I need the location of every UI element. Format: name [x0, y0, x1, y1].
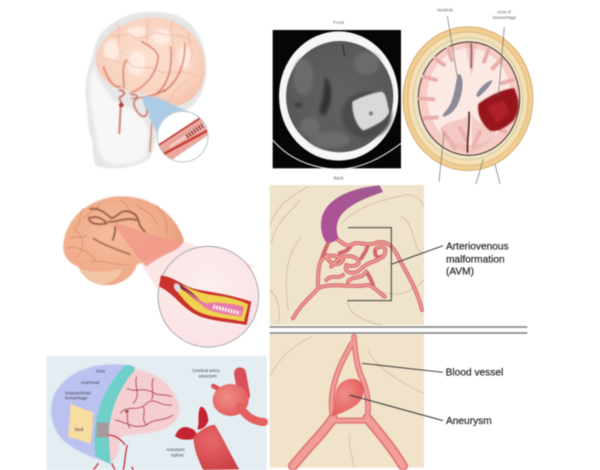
AVM leader line	[391, 246, 443, 264]
labels: Dura	[96, 369, 106, 374]
label: Area of hemorrhage: hemorrhage	[493, 15, 517, 20]
label: Front: Front	[333, 20, 345, 25]
midline	[468, 43, 474, 68]
infographic canvas	[46, 8, 534, 470]
panel: head with brain arteries	[85, 12, 213, 169]
brain	[96, 18, 205, 105]
AVM illustration	[270, 185, 424, 325]
tangled vessels	[293, 240, 422, 318]
draining vein	[321, 185, 383, 244]
labels: Cerebral artery	[192, 368, 221, 373]
labels: Skull	[74, 427, 83, 432]
artery with plaque	[159, 276, 251, 325]
magnifier wedge	[143, 96, 188, 147]
labels: rupture	[171, 452, 185, 457]
dark sulci	[88, 209, 145, 254]
labels: Aneurysm	[166, 447, 185, 452]
skull	[68, 404, 93, 444]
labels: Ventricle: Ventricle	[437, 7, 454, 12]
head silhouette	[85, 12, 206, 169]
aneurysm label: Aneurysm	[446, 416, 492, 427]
hemorrhage	[352, 92, 389, 131]
panel: subarachnoid hemorrhage illustration	[47, 356, 267, 470]
AVM label: Arteriovenous	[446, 241, 509, 252]
ruptured aneurysm	[175, 407, 239, 470]
aneurysm illustration	[270, 334, 424, 468]
labels: Subarachnoid	[65, 390, 91, 395]
CT image	[273, 30, 401, 169]
skull	[279, 31, 398, 161]
brain	[105, 369, 179, 463]
leader lines	[439, 16, 504, 184]
panel background	[47, 356, 267, 470]
wedge over brain	[114, 222, 184, 267]
arteries	[103, 42, 185, 152]
hemorrhage patch	[97, 423, 109, 437]
aneurysm sac	[331, 379, 364, 417]
panel: brain with blocked artery	[63, 196, 259, 347]
labels: Arachnoid	[81, 380, 100, 385]
blood vessel label: Blood vessel	[446, 368, 503, 379]
lens circle	[158, 246, 259, 347]
panel: brain cross-section illustration	[403, 7, 533, 184]
magnified artery lens	[157, 111, 213, 163]
pink zoom wedge	[114, 222, 253, 345]
AVM label: malformation	[446, 254, 505, 265]
aneurysm bulb	[119, 103, 124, 107]
labels: aneurysm	[199, 373, 217, 378]
blood vessel leader	[362, 363, 443, 372]
AVM label: (AVM)	[446, 267, 474, 278]
vessels	[93, 435, 133, 470]
cortex folds	[420, 48, 517, 148]
aneurysm leader	[350, 395, 443, 421]
AVM bracket	[347, 228, 391, 301]
panel: CT scan	[273, 20, 401, 181]
double divider	[270, 327, 527, 333]
labels: hemorrhage	[65, 396, 88, 401]
ventricles	[443, 74, 463, 117]
vessel network	[293, 337, 403, 466]
teal arachnoid layer	[94, 365, 135, 464]
brain	[63, 196, 184, 285]
label: Back: Back	[334, 176, 344, 181]
label: Area of hemorrhage: Area of	[497, 10, 512, 15]
scalp layer	[51, 364, 135, 463]
intact aneurysm	[213, 373, 264, 422]
labels	[65, 368, 221, 457]
panel: AVM and aneurysm illustration	[270, 185, 527, 468]
cross-section	[403, 27, 533, 171]
hemorrhage	[478, 88, 518, 131]
